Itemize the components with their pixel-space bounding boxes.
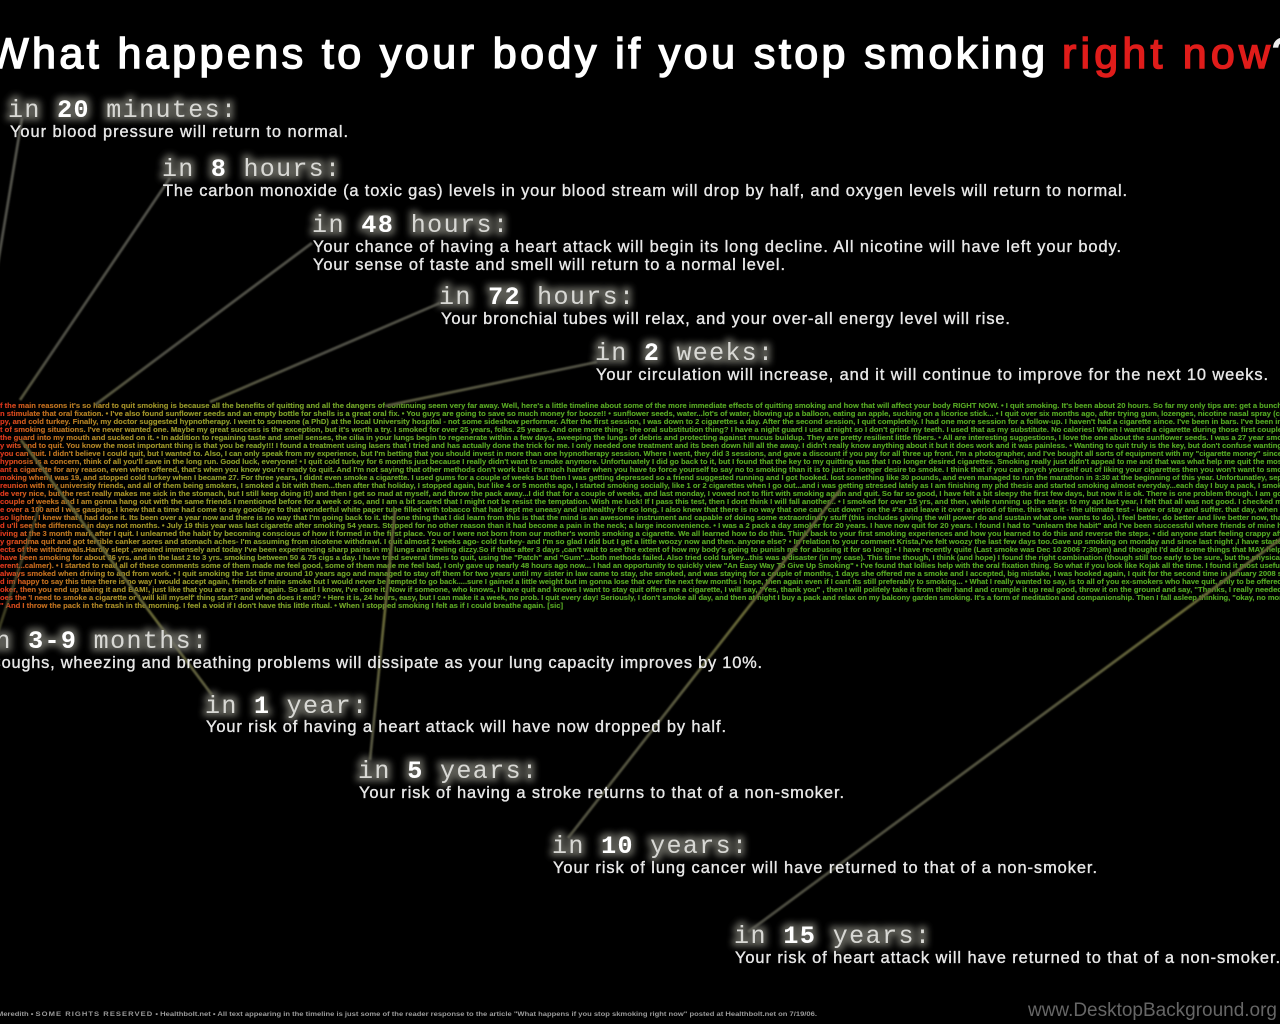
milestone: in 72 hours: in 72 hours:: [439, 283, 634, 312]
watermark: www.DesktopBackground.org: [1027, 1000, 1277, 1021]
milestone: in 15 years: in 15 years:: [734, 922, 930, 951]
text block: reader comments timeline: y grandma quit and got terrible canker sores and stomach aches- I'm assuming from nicotene withdrawl. I quit almost 2 weeks ago- cold turkey- and I'm so glad I did but I get a little woozy now and then. anyone else? • In relation to your comment Krista,I've felt woozy the last few days too.Gave up smoking on monday and since last night ,I have starte: [0, 537, 1280, 546]
text block: reader comments timeline: n stimulate that oral fixation. • I've also found sunflower seeds and an empty bottle for shells is a great oral fix. • You guys are going to save so much money for booze!! • sunflower seeds, water...lot's of water, blowing up a balloon, eating an apple, sucking on a licorice stick... • I quit over six months ago, after trying gum, lozenges, nicotine nasal spray (cl: [0, 409, 1280, 418]
text block: reader comments timeline: ects of the withdrawals.Hardly slept ,sweated immensely and today I've been experiencing sharp pains in my lungs and feeling dizzy.So if thats after 3 days ,can't wait to see the extent of how my body's going to punish me for abusing it for so long! • I have recently quite (Last smoke was Dec 10 2006 7:30pm) and thought I'd add some things that MAY help: [0, 545, 1280, 554]
milestone: in 48 hours: in 48 hours:: [312, 211, 508, 240]
milestone: in 48 hours: Your sense of taste and smell will return to a normal level.: [313, 256, 785, 274]
text block: reader comments timeline: y wits end to quit. You know the most important thing is that you be ready!!! I found a treatment using lasers that I tried and has actually done the trick for me. I only needed one treatment and its been down hill all the away. I didn't really know anything about it but it does work and it was painless. • Wanting to quit truly is the key, but don't confuse wanting: [0, 441, 1280, 450]
milestone: in 10 years: Your risk of lung cancer will have returned to that of a non-smoker.: [553, 859, 1097, 877]
text block: reader comments timeline: moking when I was 19, and stopped cold turkey when I became 27. For three years, I didnt even smoke a cigarette. I used gums for a couple of weeks but then I was getting depressed so a friend suggested running and I got hooked. lost something like 30 pounds, and even managed to run the marathon in 3:30 at the beginning of this year. Unfortunatley, sep: [0, 473, 1280, 482]
milestone: in 5 years: [358, 757, 844, 802]
milestone: in 5 years: in 5 years:: [358, 757, 537, 786]
milestone: in 48 hours: Your chance of having a heart attack will begin its long decline. All nicotine will have left your body.: [313, 238, 1121, 256]
text block: reader comments timeline: t of smoking situations. I've never wanted one. Maybe my great success is the exception, but it's worth a try. I smoked for over 25 years, folks. 25 years. And one more thing - the oral substitution thing? I have a night guard I use at night so I don't grind my teeth. I used that as my substitute. No calories! When I wanted a cigarette during those first couple: [0, 425, 1280, 434]
milestone: in 15 years: Your risk of heart attack will have returned to that of a non-smoker.: [735, 949, 1280, 967]
milestone: in 72 hours: [439, 283, 1010, 328]
text block: reader comments timeline: iving at the 3 month mark after I quit. I unlearned the habit by becoming conscious of how it formed in the first place. You or I were not born from our mother's womb smoking a cigarette. We all learned how to do this. Think back to your first smoking experiences and how you learned to do this and reverse the steps. • did anyone start feeling crappy aft: [0, 529, 1280, 538]
milestone: in 1 year: Your risk of having a heart attack will have now dropped by half.: [206, 718, 726, 736]
milestone: in 8 hours: [162, 155, 1127, 200]
milestone: in 5 years: Your risk of having a stroke returns to that of a non-smoker.: [359, 784, 844, 802]
milestone: in 15 years: [734, 922, 1280, 967]
text block: reader comments timeline: have been smoking for about 36 yrs. and in the last 2 to 3 yrs. smoking between 50 & 75 cigs a day. I have tried several times to quit, using the "Patch" and "Gum"...both methods failed. Also tried cold turkey...this was a disaster (in my case). This time though, I think (and hope) I found the right combination (though still too early to be sure, but the physical: [0, 553, 1280, 562]
text block: reader comments timeline: py, and cold turkey. Finally, my doctor suggested hypnotherapy. I went to someone (a PhD) at the local University hospital - not some sideshow performer. After the first session, I was down to 2 cigarettes a day. After the second session, I quit completely. I had one more session for a follow-up. I haven't had a cigarette since. I've been in bars. I've been in: [0, 417, 1280, 426]
text block: reader comments timeline: oes the 'I need to smoke a cigarette or I will kill myself' thing start? and when does it end? • Here it is, 24 hours, easy, but I can make it a week, no prob. I quit every day! Seriously, I don't smoke all day, and then at night I buy a pack and relax on my balcony garden smoking. It's a form of meditation and companionship. Then I fall asleep thinking, "okay, no mor: [0, 593, 1280, 602]
milestone: in 2 weeks: Your circulation will increase, and it will continue to improve for the next 10 weeks.: [596, 366, 1268, 384]
milestone: in 10 years: in 10 years:: [552, 832, 747, 861]
text block: reader comments timeline: so lighter, I knew that I had done it. Its been over a year now and there is no way that I'm going back to it. the one thing that I did learn from this is that the mind is an awesome instrument and capable of doing some extraordinary stuff (this includes giving the will power do and sustain what one wants to do). I feel better, do better and live better now, tha: [0, 513, 1280, 522]
text block: reader comments timeline: d u'll see the difference in days not months. • July 19 this year was last cigarette after smoking 54 years. Stopped for no other reason than it had become a pain in the neck; a large inconvenience. • I was a 2 pack a day smoker for 20 years. I have now quit for 20 years. I found I had to "unlearn the habit" and I've been successful where friends of mine h: [0, 521, 1280, 530]
text block: reader comments timeline: d im happy to say this time there is no way I would accept again, friends of mine smoke but I would never be tempted to go back.....sure I gained a little weight but im gonna lose that over the next few months i hope, then again even if I cant its still preferably to smoking... • What I really wanted to say, is to all of you ex-smokers who have quit, only to be offered: [0, 577, 1280, 586]
text block: reader comments timeline: e over a 100 and I was gasping. I knew that a time had come to say goodbye to that wonderful white paper tube filled with tobacco that had kept me uneasy and unhealthy for so long. I also knew that there is no way that one can "cut down" on the #'s and leave it over a period of time. this was it - the ultimate test - leave or stay and suffer. that day, when I: [0, 505, 1280, 514]
text block: reader comments timeline: [0, 401, 1280, 610]
milestone: in 20 minutes: Your blood pressure will return to normal.: [10, 123, 348, 141]
text block: reader comments timeline: reunion with my university friends, and all of them being smokers, I smoked a bit with them...then after that holiday, I stopped again, but like 4 or 5 months ago, I started smoking socially, like 1 or 2 cigarettes when I go out...and i was getting stressed lately as I am finishing my phd thesis and started smoking almost everyday...each day I buy a pack, I smok: [0, 481, 1280, 490]
milestone: in 20 minutes: in 20 minutes:: [8, 96, 236, 125]
text block: reader comments timeline: de very nice, but the rest really makes me sick in the stomach, but I still keep doing it!) and then I get so mad at myself, and throw the pack away...I did that for a couple of weeks, and last monday, I vowed not to flirt with smoking again and quit. So far so good, I have felt a bit sleepy the first few days, but now it is ok. There is one problem though. I am go: [0, 489, 1280, 498]
milestone: in 1 year: [205, 692, 726, 736]
text block: reader comments timeline: the guard into my mouth and sucked on it. • In addition to regaining taste and smell senses, the cilia in your lungs begin to regenerate within a few days, sweeping the lungs of debris and protecting against mucus buildup. They are pretty resilient little fibers. • All are interesting suggestions, I love the one about the sunflower seeds. I was a 27 year smo: [0, 433, 1280, 442]
title: What happens to your body if you stop smoking: [0, 30, 1045, 78]
milestone: in 3-9 months: [0, 627, 762, 672]
text block: reader comments timeline: you can quit. I didn't believe I could quit, but I wanted to. Also, I can only speak from my experience, but I'm betting that you should invest in more than one hypnotherapy session. Where I went, they did 3 sessions, and gave a discount if you pay for all three up front. I'm a photographer, and I've bought all sorts of equipment with my "cigarette money" since: [0, 449, 1280, 458]
milestone: in 1 year: in 1 year:: [205, 692, 367, 721]
milestone: in 2 weeks: [595, 339, 1268, 384]
text block: reader comments timeline: f the main reasons it's so hard to quit smoking is because all the benefits of quitting and all the dangers of continuing seem very far away. Well, here's a little timeline about some of the more immediate effects of quitting smoking and how that will affect your body RIGHT NOW. • I quit smoking. It's been about 20 hours. So far my only tips are: get a bunch: [0, 401, 1280, 410]
text block: reader comments timeline: hypnosis is a concern, think of all you'll save in the long run. Good luck, everyone! • I quit cold turkey for 6 months just because I really didn't want to smoke anymore. Unfortunately I did go back to it, but I found that the key to my quitting was that I no longer desired cigarettes. Smoking really just didn't appeal to me and that was what help me quit the mos: [0, 457, 1280, 466]
connector lines from milestones to text block: [0, 118, 1280, 932]
text block: reader comments timeline: couple of weeks and I am gonna hang out with the same friends I mentioned before for a week or so, and I am a bit scared that I might not be resist the temptation. Wish me luck! If I pass this test, then I dont think I will fall another... • I smoked for over 15 yrs, and then, while running up the steps to my apt last year, I felt that all was not good. I checked m: [0, 497, 1280, 506]
milestone: in 48 hours: [312, 211, 1121, 274]
milestone: in 72 hours: Your bronchial tubes will relax, and your over-all energy level will rise.: [441, 310, 1010, 328]
milestone: in 3-9 months: Coughs, wheezing and breathing problems will dissipate as your lung capacity improves by 10%.: [0, 654, 762, 672]
text block: reader comments timeline: " And I throw the pack in the trash in the morning. I feel a void if I don't have this little ritual. • When I stopped smoking I felt as if I could breathe again. [sic]: [0, 601, 564, 610]
text block: reader comments timeline: oker, then you end up taking it and BAM!, just like that you are a smoker again. So sad! I know, I've done it. Now if someone, who knows, I have quit and knows I want to stay quit offers me a cigarette, I will say, "Yes, thank you" , then I will politely take it from their hand and crumple it up real good, throw it on the ground and say, "Thanks, I really needed: [0, 585, 1280, 594]
title: right now: [1062, 30, 1271, 78]
milestone: in 10 years: [552, 832, 1097, 877]
text block: reader comments timeline: erent...calmer). • I started to read all of these comments some of them made me feel good, some of them made me feel bad, I only gave up nearly 48 hours ago now... I had an opportunity to quickly view "An Easy Way To Give Up Smoking" • I've found that lollies help with the oral fixation thing. So what if you look like Kojak all the time. I found it most useful: [0, 561, 1280, 570]
milestone: in 2 weeks: in 2 weeks:: [595, 339, 773, 368]
milestone: in 20 minutes: [8, 96, 348, 141]
text block: reader comments timeline: always smoked when driving to and from work. • I quit smoking the 1st time around 10 years ago and managed to stay off them for two years until my sister in law came to stay, she smoked, and was staying for a couple of months, 1 days she offered me a smoke and I accepted, big mistake, I was hooked again, I quit for the second time in january 2008 s: [0, 569, 1280, 578]
milestone: in 8 hours: in 8 hours:: [162, 155, 340, 184]
milestone: in 8 hours: The carbon monoxide (a toxic gas) levels in your blood stream will drop by half, and oxygen levels will return to normal.: [163, 182, 1127, 200]
footer credits: Meredith • SOME RIGHTS RESERVED • Healthbolt.net • All text appearing in the timeline is just some of the reader response to the article "What happens if you stop skmoking right now" posted at Healthbolt.net on 7/19/06.: [0, 1011, 817, 1018]
text block: reader comments timeline: ant a cigarette for any reason, even when offered, that's when you know you're ready to quit. And I'm not saying that other methods don't work but it's much harder when you have to force yourself to say no to smoking than it is to just no longer desire to smoke. I think that if you can psych yourself out of liking your cigarettes then you won't want to smo: [0, 465, 1280, 474]
